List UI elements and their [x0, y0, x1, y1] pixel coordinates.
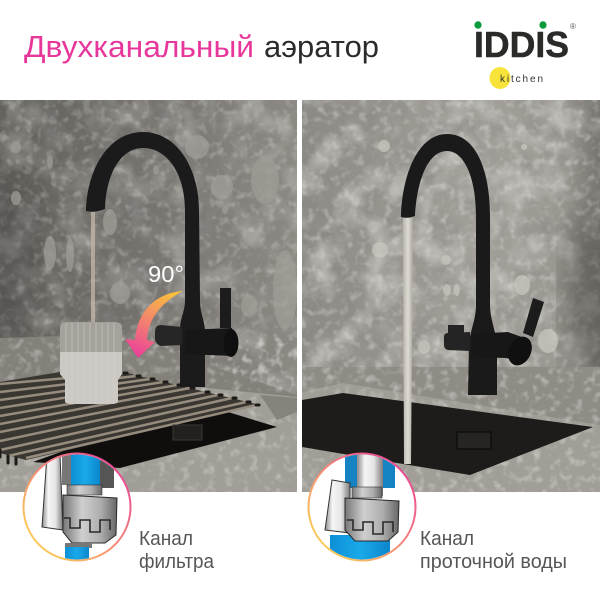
water stream — [91, 212, 95, 324]
logo: IDDIS kitchen: kitchen — [500, 74, 543, 85]
faucet — [401, 134, 544, 395]
label: flow-through channel: Канал — [420, 528, 474, 550]
title: аэратор — [264, 29, 379, 64]
logo: IDDIS kitchen: ® — [570, 22, 576, 31]
callout: filter channel aerator — [24, 450, 130, 562]
panel: left photo, filter channel — [0, 100, 297, 492]
arrow: 90 degree turn — [125, 291, 183, 358]
logo: IDDIS kitchen: IDDIS — [474, 24, 569, 65]
sink — [302, 393, 593, 475]
countertop — [302, 367, 600, 492]
label: filter channel — [139, 528, 215, 573]
logo: IDDIS kitchen — [474, 21, 576, 89]
faucet — [86, 132, 238, 387]
stone wall — [302, 100, 600, 390]
glass — [60, 322, 122, 404]
sink — [33, 412, 277, 468]
sink badge — [173, 425, 202, 440]
label: filter channel: Канал — [139, 528, 193, 550]
water stream — [403, 217, 413, 464]
drying rack — [0, 372, 260, 464]
panel: right photo, flow-through channel — [302, 100, 600, 492]
callout: flow-through channel aerator — [308, 450, 416, 563]
title: Двухканальный — [24, 29, 254, 64]
label: flow-through channel — [420, 528, 567, 573]
countertop — [0, 336, 297, 492]
label: filter channel: фильтра — [139, 551, 215, 573]
stone wall — [0, 100, 297, 400]
label: 90 degrees: 90° — [148, 261, 184, 287]
label: flow-through channel: проточной воды — [420, 551, 567, 573]
title — [24, 29, 379, 64]
